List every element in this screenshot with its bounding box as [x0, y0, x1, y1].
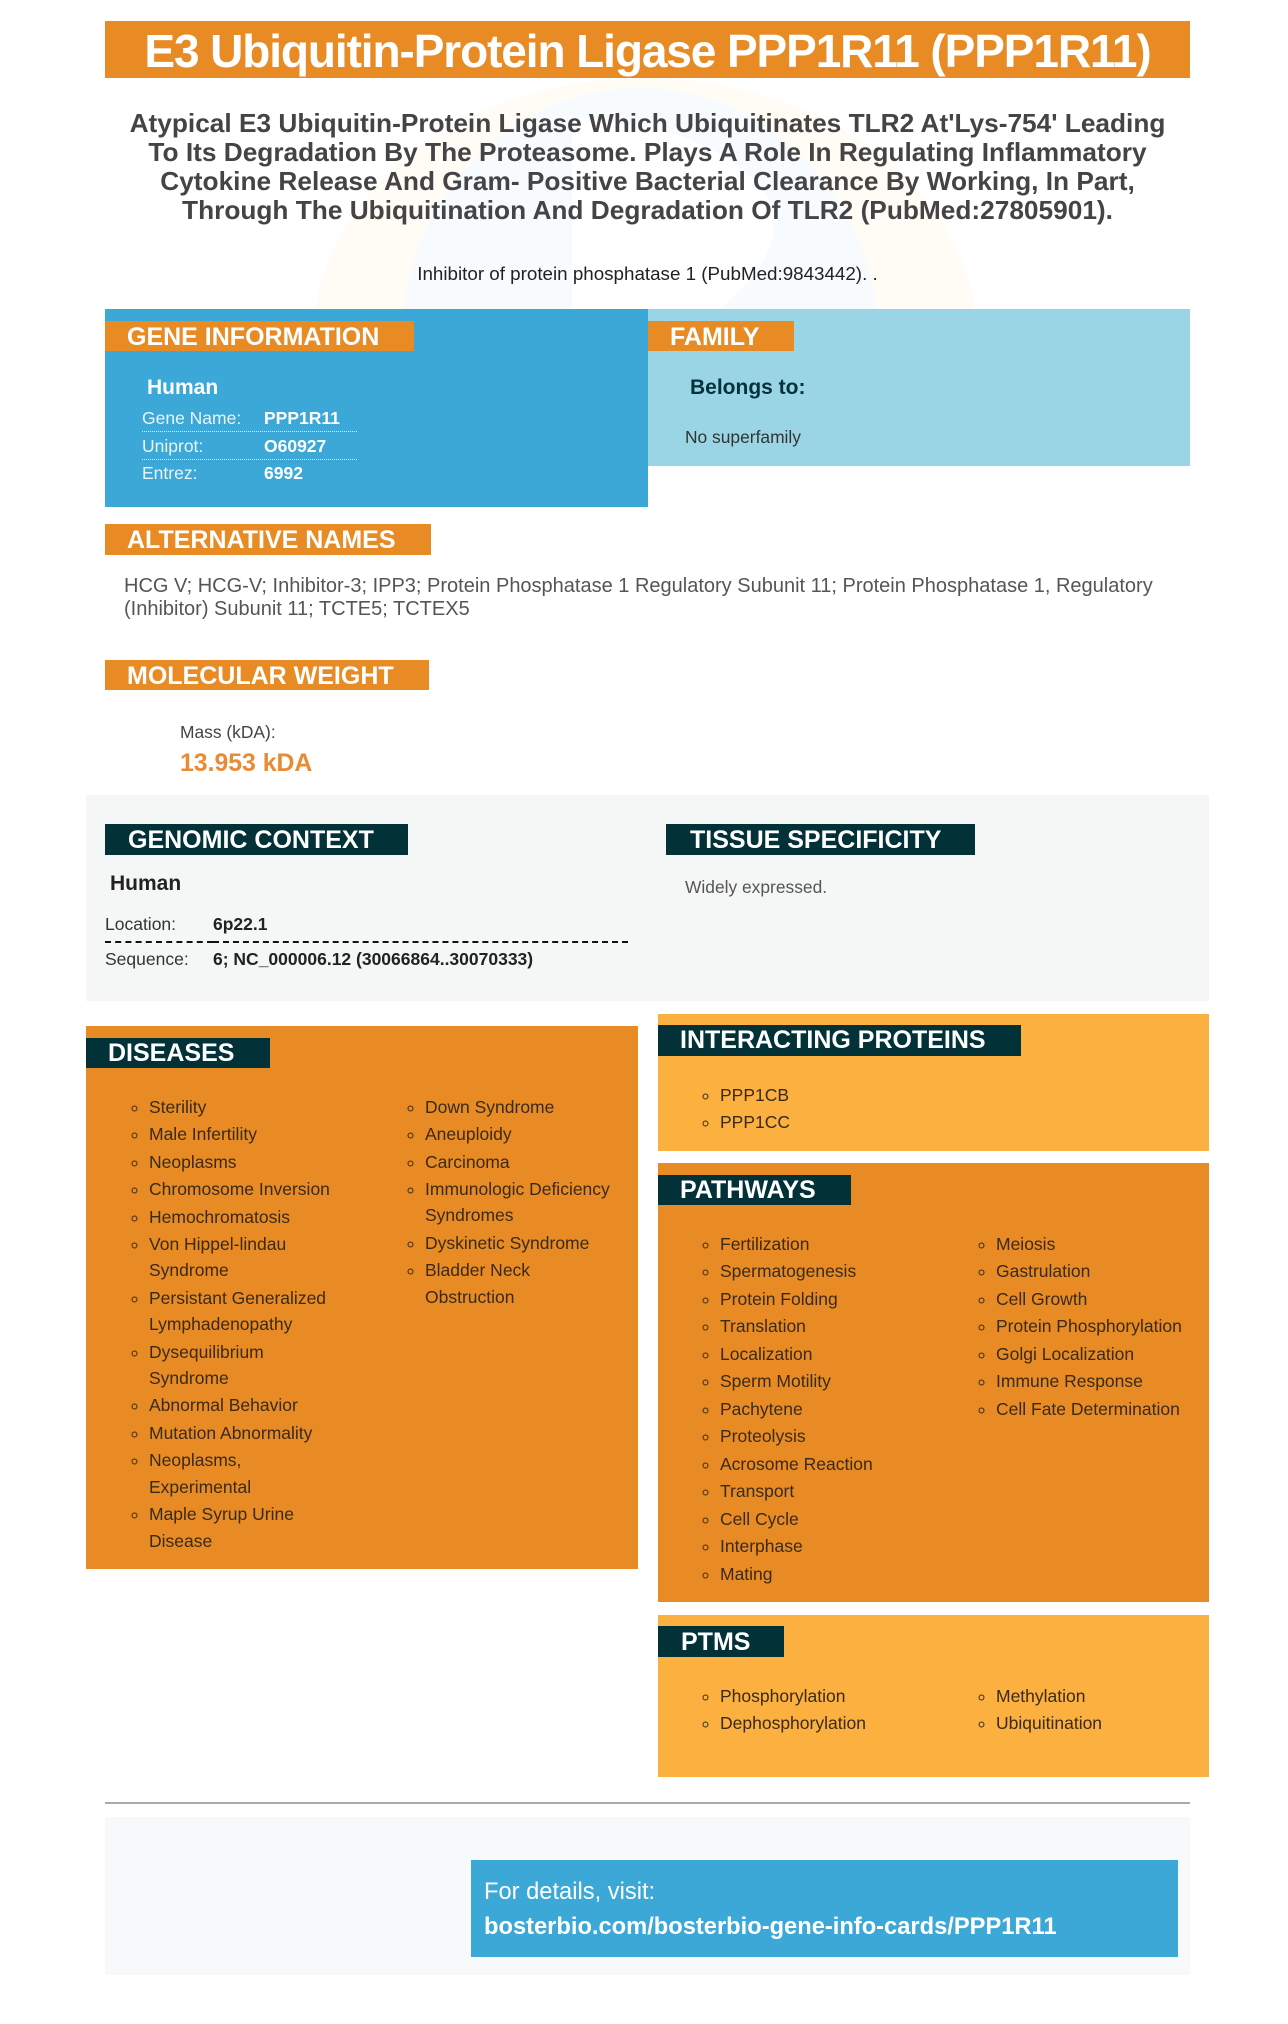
pathways list column 1: Transport: [720, 1481, 794, 1501]
entrez row: [142, 463, 303, 483]
alternative names text: (Inhibitor) Subunit 11; TCTE5; TCTEX5: [124, 598, 470, 620]
diseases list column 1: Abnormal Behavior: [149, 1395, 298, 1415]
species label: Human: [147, 376, 218, 399]
uniprot row: Uniprot:: [142, 436, 203, 456]
panel: ptms: [658, 1615, 1209, 1777]
sequence row: [105, 949, 533, 969]
diseases list column 2: Down Syndrome: [425, 1097, 554, 1117]
diseases list column 1: Mutation Abnormality: [149, 1423, 312, 1443]
diseases list column 1: Von Hippel-lindau: [149, 1234, 286, 1254]
pathways list column 2: Protein Phosphorylation: [996, 1316, 1182, 1336]
diseases list column 1: Chromosome Inversion: [149, 1179, 330, 1199]
pathways list column 1: Cell Cycle: [720, 1509, 799, 1529]
pathways list column 2: Gastrulation: [996, 1261, 1090, 1281]
panel: family: [648, 309, 1190, 466]
subtitle description: Cytokine Release And Gram- Positive Bacterial Clearance By Working, In Part,: [160, 166, 1135, 196]
location row: Location:: [105, 914, 176, 934]
interacting proteins list: PPP1CB: [720, 1085, 789, 1105]
pathways list column 1: Mating: [720, 1564, 773, 1584]
diseases list column 2: Bladder Neck: [425, 1260, 530, 1280]
alternative names text: [124, 575, 1153, 620]
panel: pathways: [658, 1163, 1209, 1602]
pathways list column 1: Acrosome Reaction: [720, 1454, 873, 1474]
call to action box: [471, 1860, 1178, 1957]
diseases list column 1: Lymphadenopathy: [149, 1314, 292, 1334]
heading: family: [648, 321, 794, 351]
diseases list column 1: Neoplasms,: [149, 1450, 241, 1470]
diseases list column 2: Carcinoma: [425, 1152, 510, 1172]
diseases list column 1: Syndrome: [149, 1260, 229, 1280]
pathways list column 2: Golgi Localization: [996, 1344, 1134, 1364]
visit url: bosterbio.com/bosterbio-gene-info-cards/PPP1R11: [484, 1914, 1057, 1940]
diseases list column 1: Male Infertility: [149, 1124, 257, 1144]
species label: Human: [110, 872, 181, 895]
diseases list column 1: Syndrome: [149, 1368, 229, 1388]
heading: pathways: PATHWAYS: [680, 1176, 816, 1204]
pathways list column 1: [702, 1234, 873, 1584]
gene name row: [142, 407, 357, 432]
diseases list column 1: Neoplasms: [149, 1152, 237, 1172]
ptms list column 1: Dephosphorylation: [720, 1713, 866, 1733]
panel: footer: [105, 1817, 1190, 1975]
entrez row: 6992: [264, 463, 303, 483]
watermark logo: [316, 78, 974, 309]
heading: ptms: PTMS: [681, 1628, 750, 1656]
ptms list column 1: [702, 1686, 866, 1733]
pathways list column 1: Fertilization: [720, 1234, 809, 1254]
alternative names text: HCG V; HCG-V; Inhibitor-3; IPP3; Protein Phosphatase 1 Regulatory Subunit 11; Protein Phosphatase 1, Regulatory: [124, 575, 1153, 597]
diseases list column 2: [408, 1097, 610, 1307]
panel: genomic context and tissue specificity: 6; NC_000006.12 (30066864..30070333): [213, 949, 533, 969]
diseases list column 2: Obstruction: [425, 1287, 514, 1307]
panel: gene information: [105, 309, 648, 507]
heading: ptms: [658, 1626, 784, 1657]
heading: gene information: GENE INFORMATION: [127, 323, 379, 351]
diseases list column 2: Dyskinetic Syndrome: [425, 1233, 589, 1253]
heading: diseases: DISEASES: [108, 1039, 234, 1067]
mass label: Mass (kDA):: [180, 722, 276, 742]
diseases list column 2: Immunologic Deficiency: [425, 1179, 610, 1199]
panel: genomic context and tissue specificity: [86, 795, 1209, 1001]
family value: No superfamily: [685, 427, 801, 447]
subtitle description: Atypical E3 Ubiquitin-Protein Ligase Which Ubiquitinates TLR2 At'Lys-754' Leading: [130, 108, 1165, 138]
heading: alternative names: ALTERNATIVE NAMES: [127, 526, 396, 554]
subtitle description: To Its Degradation By The Proteasome. Plays A Role In Regulating Inflammatory: [148, 137, 1147, 167]
pathways list column 1: Sperm Motility: [720, 1371, 831, 1391]
heading: interacting proteins: INTERACTING PROTEINS: [680, 1026, 986, 1054]
diseases list column 1: Hemochromatosis: [149, 1207, 290, 1227]
entrez row: Entrez:: [142, 463, 197, 483]
uniprot row: O60927: [264, 436, 326, 456]
panel: diseases: [86, 1026, 638, 1569]
gene name row: PPP1R11: [264, 408, 340, 428]
title banner: E3 Ubiquitin-Protein Ligase PPP1R11 (PPP1R11): [144, 25, 1151, 77]
visit label: For details, visit:: [484, 1879, 655, 1905]
heading: tissue specificity: TISSUE SPECIFICITY: [690, 826, 941, 854]
secondary description: Inhibitor of protein phosphatase 1 (PubMed:9843442). .: [417, 263, 878, 284]
gene name row: Gene Name:: [142, 408, 241, 428]
pathways list column 1: Protein Folding: [720, 1289, 838, 1309]
mass value: 13.953 kDA: [180, 750, 312, 777]
ptms list column 2: Ubiquitination: [996, 1713, 1102, 1733]
interacting proteins list: [702, 1085, 790, 1132]
subtitle description: Through The Ubiquitination And Degradation Of TLR2 (PubMed:27805901).: [182, 195, 1113, 225]
subtitle description: [130, 108, 1165, 225]
diseases list column 1: Maple Syrup Urine: [149, 1504, 294, 1524]
pathways list column 1: Localization: [720, 1344, 812, 1364]
pathways list column 2: [978, 1234, 1182, 1419]
diseases list column 1: Dysequilibrium: [149, 1342, 264, 1362]
diseases list column 2: Aneuploidy: [425, 1124, 512, 1144]
panel: interacting proteins: [658, 1014, 1209, 1151]
heading: genomic context: GENOMIC CONTEXT: [128, 826, 374, 854]
ptms list column 2: Methylation: [996, 1686, 1086, 1706]
heading: molecular weight: MOLECULAR WEIGHT: [127, 662, 394, 690]
pathways list column 1: Translation: [720, 1316, 806, 1336]
pathways list column 1: Pachytene: [720, 1399, 803, 1419]
pathways list column 1: Interphase: [720, 1536, 803, 1556]
uniprot row: [142, 435, 357, 460]
pathways list column 2: Immune Response: [996, 1371, 1143, 1391]
pathways list column 2: Meiosis: [996, 1234, 1055, 1254]
ptms list column 1: Phosphorylation: [720, 1686, 846, 1706]
location row: [105, 914, 267, 934]
diseases list column 1: [132, 1097, 330, 1550]
diseases list column 1: Experimental: [149, 1477, 251, 1497]
panel: genomic context and tissue specificity: 6p22.1: [213, 914, 267, 934]
heading: family: FAMILY: [670, 323, 759, 351]
interacting proteins list: PPP1CC: [720, 1112, 790, 1132]
diseases list column 2: Syndromes: [425, 1205, 514, 1225]
tissue text: Widely expressed.: [685, 877, 827, 897]
belongs to label: Belongs to:: [690, 376, 806, 399]
heading: diseases: [86, 1038, 270, 1068]
pathways list column 1: Proteolysis: [720, 1426, 806, 1446]
diseases list column 1: Persistant Generalized: [149, 1288, 326, 1308]
sequence row: Sequence:: [105, 949, 189, 969]
pathways list column 2: Cell Fate Determination: [996, 1399, 1180, 1419]
diseases list column 1: Disease: [149, 1530, 212, 1550]
ptms list column 2: [978, 1686, 1102, 1733]
heading: pathways: [658, 1175, 851, 1205]
pathways list column 1: Spermatogenesis: [720, 1261, 856, 1281]
pathways list column 2: Cell Growth: [996, 1289, 1087, 1309]
diseases list column 1: Sterility: [149, 1097, 206, 1117]
